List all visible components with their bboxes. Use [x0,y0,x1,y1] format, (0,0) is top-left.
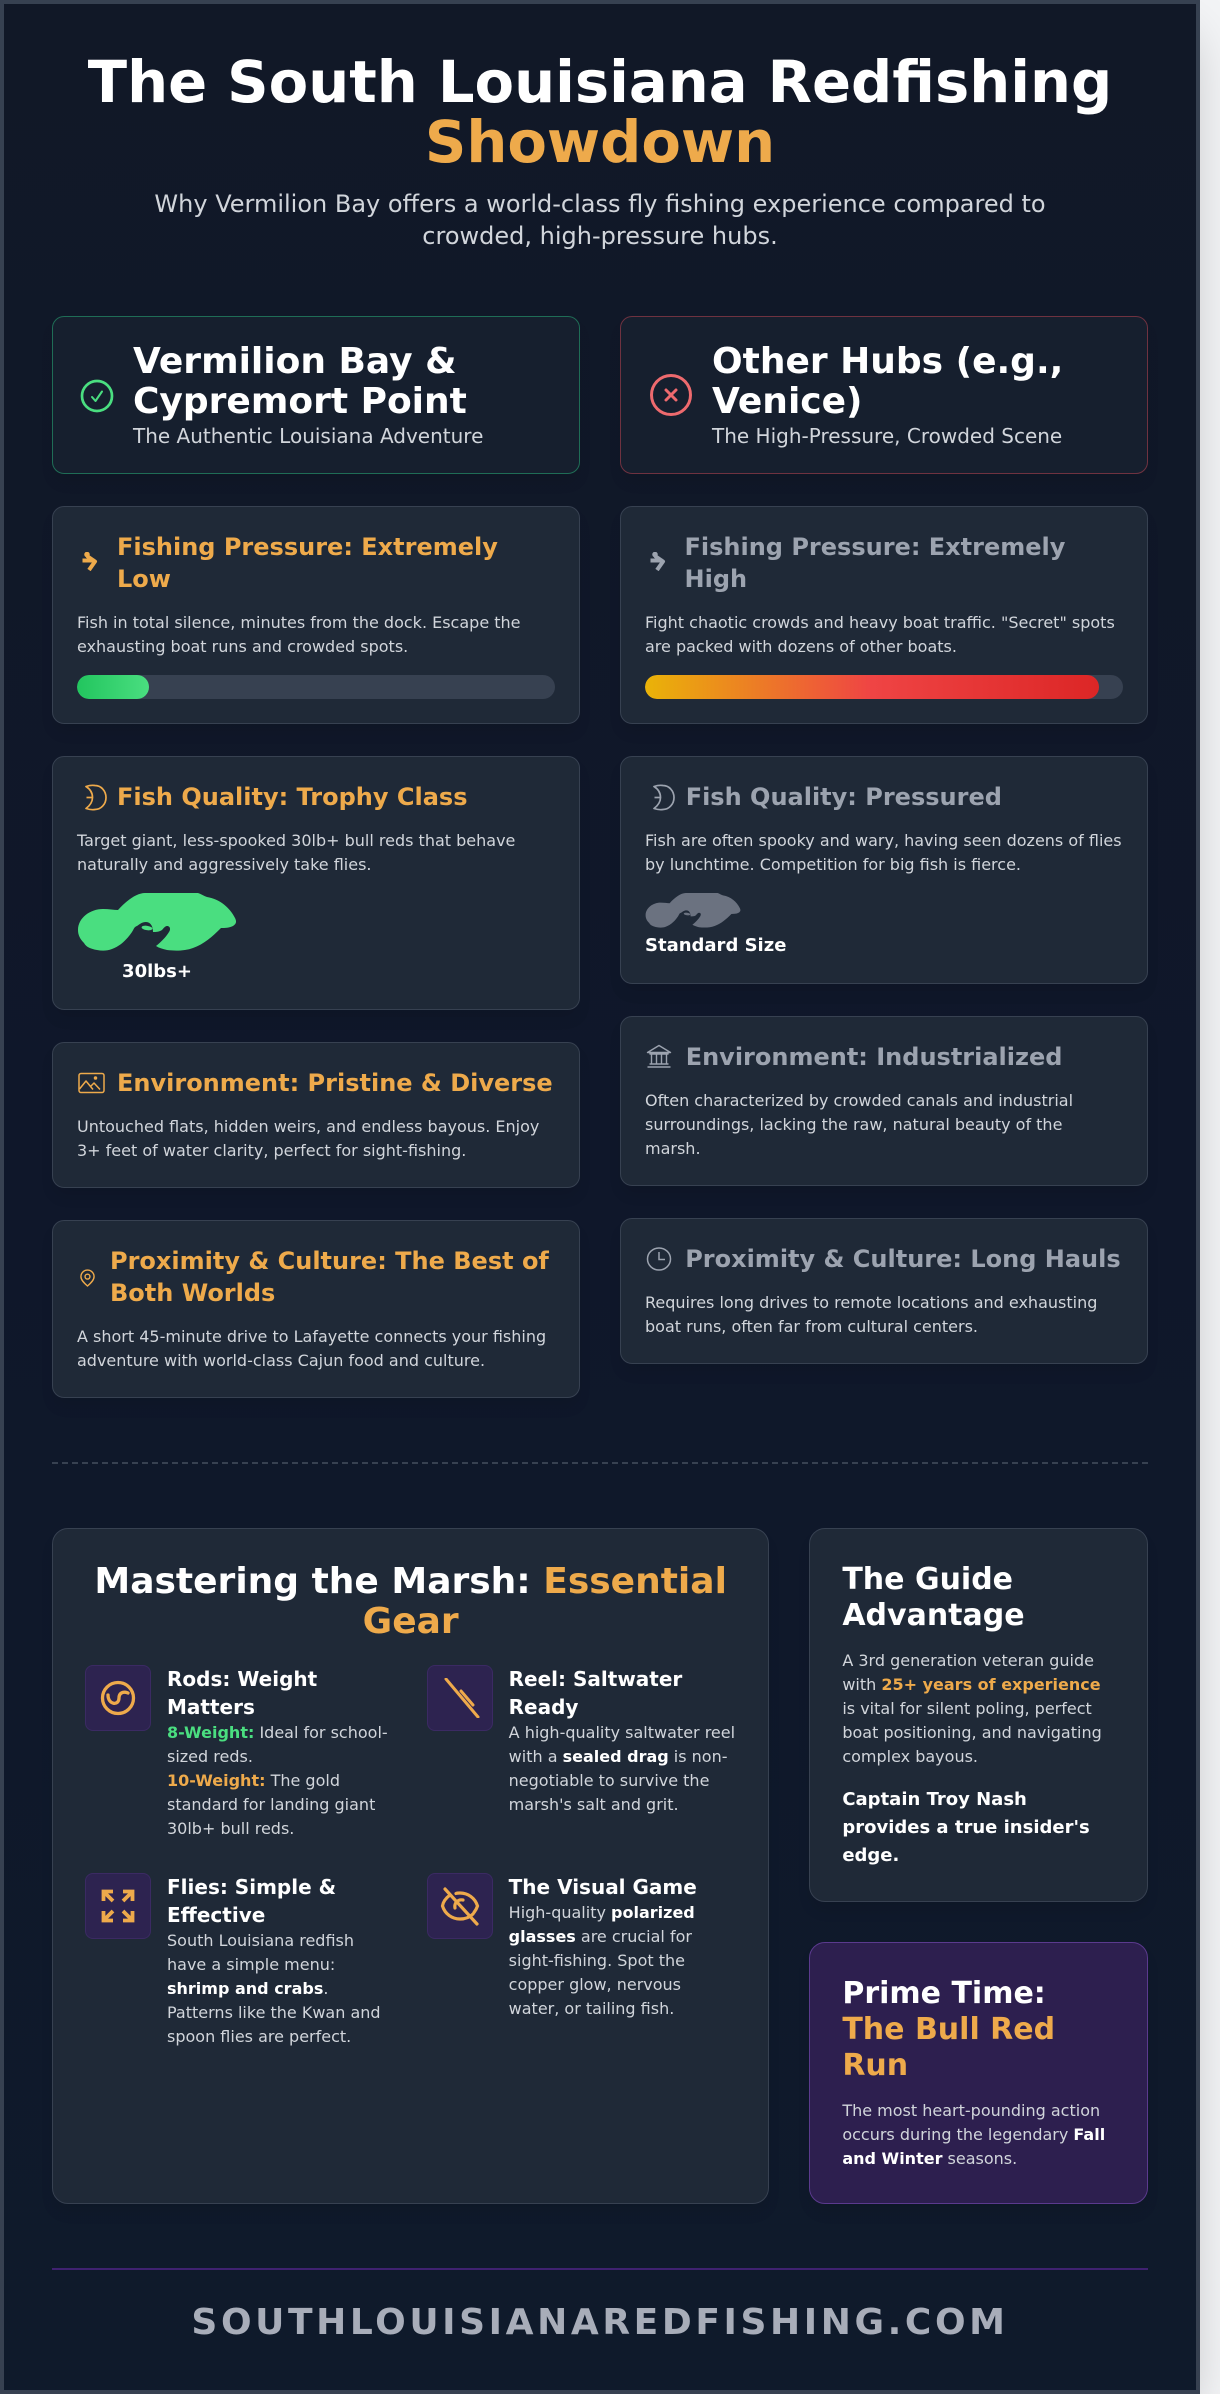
item title: The Visual Game [509,1875,697,1899]
icon: landscape image [78,1072,105,1094]
heading: Other Hubs [712,341,1063,422]
description [645,1091,1073,1158]
heading: Environment: Industrialized [686,1043,1062,1071]
heading: Prime Time: [842,1976,1046,2011]
panel: fish quality pressured [620,756,1148,984]
icon: fish quality [85,784,107,810]
item text: marsh's salt and grit. [509,1795,679,1814]
description: naturally and aggressively take flies. [77,855,371,874]
panel: fishing pressure low [52,506,580,724]
tagline: The Authentic Louisiana Adventure [133,424,483,448]
heading: Environment: Pristine & Diverse [117,1069,553,1097]
trophy fish graphic and size label [78,893,236,982]
pressure bar: 15 percent [77,675,555,699]
heading: Fish Quality: Pressured [686,783,1002,811]
item text: water, or tailing fish. [509,1999,674,2018]
description: A short 45-minute drive to Lafayette connects your fishing [77,1327,546,1346]
gear item: visual game [427,1873,737,2049]
item text: sized reds. [167,1747,253,1766]
heading: Vermilion Bay: Cypremort Point [133,381,467,422]
icon: rod [85,1665,151,1731]
item text: sight-fishing. Spot the [509,1951,685,1970]
icon: map pin [80,1269,95,1287]
panel: proximity long hauls [620,1218,1148,1364]
guide description [842,1649,1115,1769]
heading: Fishing Pressure: Extremely [684,533,1065,561]
item text [167,1723,388,1838]
gear item: reel [427,1665,735,1814]
icon: red x circle [650,374,692,416]
heading [842,1976,1115,2084]
item text: shrimp and crabs. [167,1979,328,1998]
heading: The Bull Red [842,2012,1055,2047]
item title [509,1667,682,1719]
description [77,613,520,656]
heading: Proximity & Culture: The Best of [110,1247,549,1275]
icon: flies [85,1873,151,1939]
website address: SOUTHLOUISIANAREDFISHING.COM [191,2302,1009,2343]
icon: pressure [650,552,666,571]
guide description: A 3rd generation veteran guide [842,1651,1094,1670]
season description: and Winter seasons. [842,2149,1017,2168]
item title [167,1875,336,1927]
icon: reel [427,1665,493,1731]
description: by lunchtime. Competition for big fish is fierce. [645,855,1021,874]
description: exhausting boat runs and crowded spots. [77,637,408,656]
captain callout: Captain Troy Nash [842,1789,1027,1810]
item text: 10-Weight: The gold [167,1771,340,1790]
icon: small gray fish [646,893,740,928]
item text [509,1901,695,2021]
size label: 30lbs+ [122,961,192,982]
subtitle: crowded, high-pressure hubs. [422,222,778,250]
description: surroundings, lacking the raw, natural beauty of the [645,1115,1062,1134]
description: adventure with world-class Cajun food and culture. [77,1351,485,1370]
heading: Other Hubs: Other Hubs (e.g., [712,341,1063,382]
season description: The most heart-pounding action [842,2101,1100,2120]
icon: pressure [82,552,98,571]
icon: clock [646,1247,672,1271]
item text: Patterns like the Kwan and [167,2003,381,2022]
item title: Ready [509,1695,578,1719]
description: Target giant, less-spooked 30lb+ bull reds that behave [77,831,515,850]
heading: mastering the marsh [94,1561,727,1642]
season description: occurs during the legendary Fall [842,2125,1105,2144]
title [88,49,1112,176]
header: title and subtitle [88,49,1112,250]
item text: copper glow, nervous [509,1975,681,1994]
item text: 30lb+ bull reds. [167,1819,294,1838]
panel: Vermilion Bay column header [52,316,580,474]
panel: fish quality trophy [52,756,580,1010]
item text: have a simple menu: [167,1955,335,1974]
heading: Other Hubs: Venice) [712,381,862,422]
item title: Reel: Saltwater [509,1667,682,1691]
heading: Fish Quality: Trophy Class [117,783,467,811]
heading [842,1562,1115,1634]
guide description: with 25+ years of experience [842,1675,1101,1694]
description: Fish are often spooky and wary, having seen dozens of flies [645,831,1122,850]
captain callout: edge. [842,1845,899,1866]
heading: Vermilion Bay: Vermilion Bay & [133,341,457,382]
title: The South Louisiana Redfishing [88,49,1112,116]
tagline: The High-Pressure, Crowded Scene [712,424,1062,448]
panel: proximity best of both [52,1220,580,1398]
item text: negotiable to survive the [509,1771,709,1790]
size label: Standard Size [645,935,786,956]
heading: Fishing Pressure: Extremely [117,533,498,561]
icon: eye off [427,1873,493,1939]
title: Showdown [425,109,775,176]
description [77,1117,539,1160]
description: boat runs, often far from cultural centers. [645,1317,978,1336]
item text [167,1931,381,2046]
item text [508,1723,735,1814]
guide description: boat positioning, and navigating [842,1723,1102,1742]
item text: South Louisiana redfish [167,1931,354,1950]
description: Fish in total silence, minutes from the dock. Escape the [77,613,520,632]
captain callout [842,1786,1115,1870]
heading: Vermilion Bay [133,341,467,422]
heading: Run [842,2048,908,2083]
description: Fight chaotic crowds and heavy boat traffic. "Secret" spots [645,613,1115,632]
pressure bar: 95 percent [645,675,1123,699]
captain callout: provides a true insider's [842,1817,1090,1838]
subtitle [154,190,1046,250]
heading: Proximity & Culture: Long Hauls [685,1245,1121,1273]
item text: High-quality polarized [509,1903,695,1922]
description [77,1327,546,1370]
description: Often characterized by crowded canals and industrial [645,1091,1073,1110]
heading: mastering the marsh: Gear [363,1601,459,1642]
heading [110,1247,550,1307]
description [645,613,1115,656]
heading: Both Worlds [110,1279,275,1307]
description: marsh. [645,1139,701,1158]
panel: environment industrialized [620,1016,1148,1186]
item text: spoon flies are perfect. [167,2027,351,2046]
icon: fish quality [653,784,675,810]
heading: mastering the marsh: Mastering the Marsh: Essential [94,1561,727,1602]
standard fish graphic and size label [645,893,786,956]
heading: Low [117,565,171,593]
panel: the guide advantage [809,1528,1148,1902]
description: 3+ feet of water clarity, perfect for sight-fishing. [77,1141,466,1160]
description [645,831,1122,874]
heading [684,533,1065,593]
description [76,831,515,874]
panel: fishing pressure high [620,506,1148,724]
guide description: complex bayous. [842,1747,978,1766]
icon: large green fish [78,893,236,951]
description: are packed with dozens of other boats. [645,637,957,656]
item text: glasses are crucial for [509,1927,692,1946]
item title: Matters [167,1695,255,1719]
footer: website [52,2268,1148,2342]
panel: prime time [809,1942,1148,2204]
season description [842,2099,1115,2171]
item title: Effective [167,1903,265,1927]
icon: green check circle [80,380,114,412]
item text: 8-Weight: Ideal for school- [167,1723,388,1742]
panel: Other Hubs column header [620,316,1148,474]
item text: standard for landing giant [167,1795,375,1814]
item title: Flies: Simple & [167,1875,336,1899]
heading: Advantage [842,1598,1025,1633]
panel: environment pristine [52,1042,580,1188]
heading [117,533,498,593]
panel: essential gear [52,1528,769,2204]
icon: bank building [646,1044,672,1068]
description [645,1293,1097,1336]
description: Requires long drives to remote locations and exhausting [645,1293,1097,1312]
description: Untouched flats, hidden weirs, and endless bayous. Enjoy [77,1117,539,1136]
gear item: rods [85,1665,388,1838]
item text: with a sealed drag is non- [509,1747,728,1766]
item text: A high-quality saltwater reel [509,1723,735,1742]
item title: Rods: Weight [167,1667,317,1691]
subtitle: Why Vermilion Bay offers a world-class fly fishing experience compared to [154,190,1046,218]
item title [167,1667,317,1719]
gear item: flies [85,1873,381,2046]
heading: The Guide [842,1562,1013,1597]
heading: High [684,565,747,593]
guide description: is vital for silent poling, perfect [842,1699,1092,1718]
